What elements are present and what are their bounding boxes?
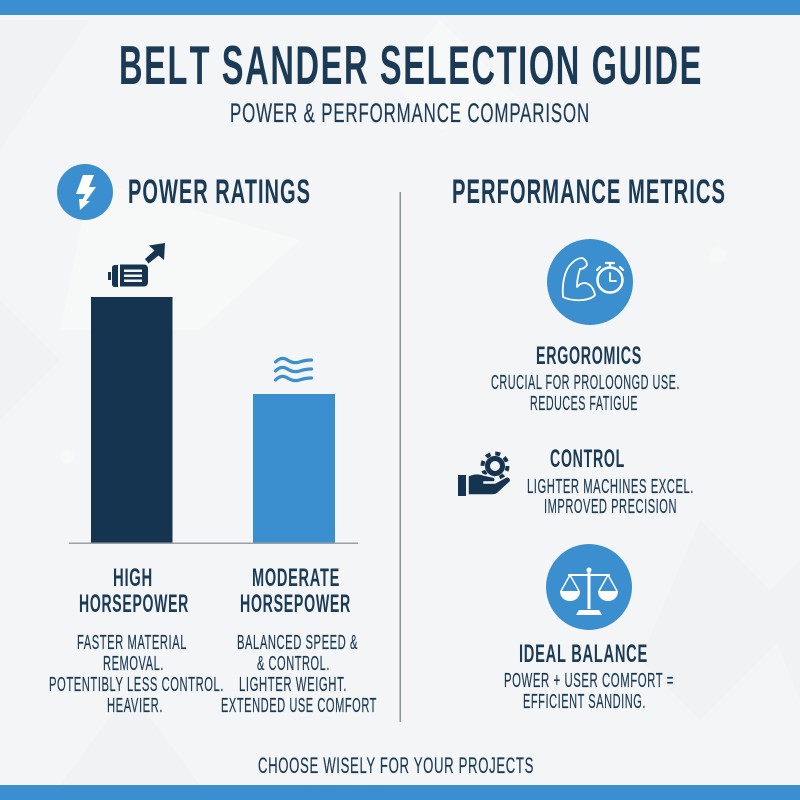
label: high horsepower: HIGH — [113, 564, 153, 592]
bottom bar — [0, 785, 800, 800]
bar: moderate horsepower — [253, 394, 335, 543]
text: moderate horsepower details: BALANCED SPEED & — [237, 632, 358, 654]
icon: muscle and stopwatch — [547, 239, 633, 325]
top bar — [0, 0, 800, 15]
label: high horsepower — [79, 564, 189, 618]
icon: motor with arrow — [108, 243, 165, 287]
footer text: CHOOSE WISELY FOR YOUR PROJECTS — [258, 753, 534, 778]
chart baseline — [69, 542, 358, 544]
label: high horsepower: HORSEPOWER — [79, 590, 189, 618]
heading: ergoromics: ERGOROMICS — [536, 342, 642, 370]
divider — [400, 192, 401, 722]
heading: power ratings: POWER RATINGS — [128, 173, 311, 211]
text: moderate horsepower details — [221, 632, 377, 717]
text: high horsepower details: REMOVAL. — [103, 653, 164, 675]
label: moderate horsepower: MODERATE — [252, 564, 340, 592]
text: moderate horsepower details: & CONTROL. — [257, 653, 330, 675]
text: moderate horsepower details: EXTENDED USE COMFORT — [221, 695, 377, 717]
text: control details: IMPROVED PRECISION — [544, 496, 677, 518]
icon: hand with gear — [458, 454, 511, 496]
text: ergoromics details — [491, 372, 680, 415]
text: ideal balance details: EFFICIENT SANDING. — [523, 691, 646, 713]
heading: ideal balance: IDEAL BALANCE — [519, 640, 648, 668]
text: ideal balance details: POWER + USER COMFORT = — [504, 670, 674, 692]
text: ideal balance details — [504, 670, 674, 713]
text: high horsepower details — [49, 632, 224, 717]
icon: lightning bolt — [57, 164, 113, 220]
icon: balance scale — [546, 544, 632, 630]
text: moderate horsepower details: LIGHTER WEIGHT. — [239, 674, 347, 696]
label: moderate horsepower — [240, 564, 351, 618]
text: high horsepower details: FASTER MATERIAL — [77, 632, 187, 654]
bar: high horsepower — [91, 297, 172, 543]
text: control details — [527, 476, 694, 518]
text: ergoromics details: REDUCES FATIGUE — [530, 393, 638, 415]
text: high horsepower details: HEAVIER. — [107, 695, 163, 717]
icon: waves — [276, 358, 312, 381]
bar chart: horsepower comparison — [69, 297, 358, 544]
label: moderate horsepower: HORSEPOWER — [240, 590, 351, 618]
subtitle: POWER & PERFORMANCE COMPARISON — [230, 98, 590, 128]
heading: control: CONTROL — [550, 445, 625, 473]
text: high horsepower details: POTENTIBLY LESS CONTROL. — [49, 674, 224, 696]
